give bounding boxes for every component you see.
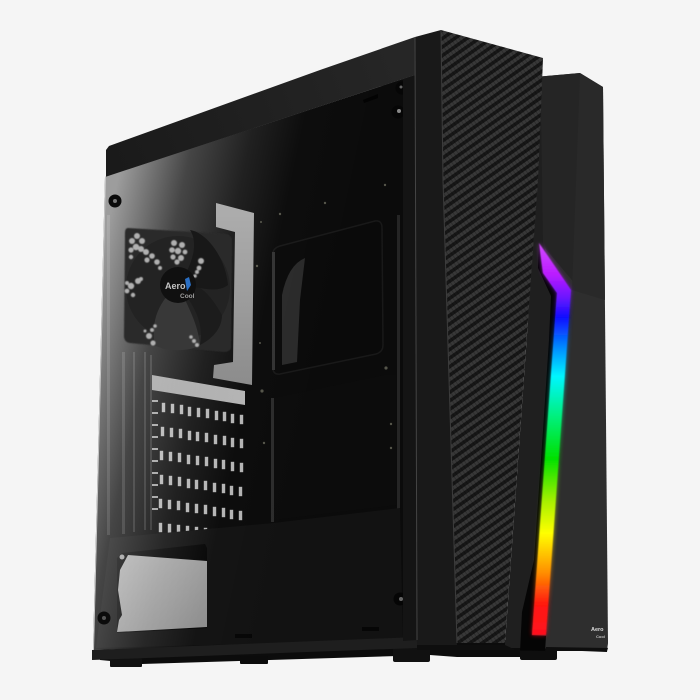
black channel beside light bar xyxy=(520,243,557,652)
pillar highlight lines xyxy=(414,30,458,643)
slot row 4 xyxy=(160,475,242,496)
RGB light bar xyxy=(532,243,571,635)
AeroCool logo: Aero xyxy=(591,627,604,633)
glass interior base xyxy=(93,75,417,650)
vertical rails at left xyxy=(107,215,152,535)
side: tempered glass panel xyxy=(92,75,417,660)
AeroCool logo xyxy=(591,627,605,639)
glass reflection xyxy=(93,75,417,650)
right glass frame xyxy=(403,75,417,641)
slot row 1 xyxy=(162,403,243,424)
PSU shroud vents xyxy=(235,627,379,638)
PSU shroud xyxy=(96,508,403,648)
glass panel screws xyxy=(98,82,416,632)
slot row 5 xyxy=(159,499,242,520)
drive bay lower xyxy=(271,375,396,522)
bottom rail xyxy=(92,637,417,660)
glass left edge highlight xyxy=(93,177,106,650)
PCI ventilated slots xyxy=(152,375,245,534)
front band beside carbon panel xyxy=(505,110,557,648)
drive bay upper xyxy=(272,221,383,374)
fan blades xyxy=(126,230,230,350)
fan hub with logo: Aero xyxy=(165,281,186,291)
top bar xyxy=(152,375,245,405)
carbon fibre front panel xyxy=(441,30,543,643)
top glass vent slot xyxy=(363,94,378,103)
base of front xyxy=(417,645,608,652)
PSU opening xyxy=(117,544,207,633)
front pillar xyxy=(415,30,457,646)
fan grille dots xyxy=(125,233,204,347)
graphics card bracket xyxy=(213,203,254,385)
fan frame xyxy=(124,228,232,352)
fan hub with logo xyxy=(160,267,196,303)
fan xyxy=(124,228,232,352)
drive bay cutout highlight xyxy=(282,258,305,365)
motherboard tray screws xyxy=(256,184,392,449)
AeroCool logo: Cool xyxy=(596,634,605,639)
feet and underside xyxy=(100,640,608,667)
slot clips xyxy=(152,400,158,510)
slot row 6 xyxy=(159,523,215,534)
slot row 3 xyxy=(160,451,243,472)
right rail xyxy=(397,215,400,509)
side: top strip xyxy=(106,37,415,177)
slot row 2 xyxy=(161,427,243,448)
back panel right side xyxy=(520,73,608,650)
RGB light bar glow xyxy=(532,243,571,635)
fan hub with logo: Cool xyxy=(180,293,195,300)
